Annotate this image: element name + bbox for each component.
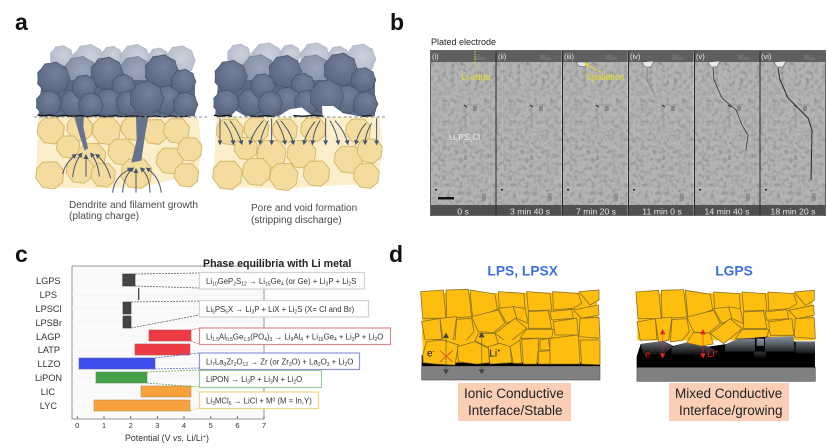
time labels: 14 min 40 s (705, 206, 750, 216)
y axis labels: LLZO (38, 359, 60, 369)
schematic: dendrite and filament growth (36, 44, 202, 193)
reaction box: LLZO: O (236, 358, 243, 366)
reaction box: halides: 0 (272, 398, 275, 404)
label: Li edge: Li edge (461, 72, 491, 82)
x axis numbers: 6 (235, 421, 240, 430)
reaction box: LAGP: Al (293, 332, 301, 342)
reaction box: argyrodites: 6 (212, 310, 215, 316)
callout: mixed conductive: Interface/growing (679, 403, 783, 418)
y axis labels: LPSCl (35, 304, 62, 314)
reaction box: LLZO: → Zr (or Zr (248, 358, 289, 366)
reaction box: LGPS: 4 (281, 282, 284, 288)
reaction box: LAGP: (PO (250, 332, 264, 342)
label: Li6PS5Cl: 6 (455, 138, 458, 144)
reaction box: LLZO: O (347, 358, 353, 366)
label: Li6PS5Cl: Li (449, 133, 455, 142)
y axis labels (35, 276, 62, 411)
reaction box: LLZO: 2 (344, 362, 347, 368)
panel b: time-lapse micrographs (430, 37, 826, 216)
reaction box: LLZO: 3 (224, 362, 227, 368)
reaction box: argyrodites: X → Li (228, 305, 252, 314)
frame labels: (vi) (761, 52, 772, 61)
x axis title: + (203, 434, 206, 440)
reaction box: argyrodites: S (X= Cl and Br) (297, 305, 355, 314)
reaction box: argyrodites: PS (215, 305, 225, 314)
reaction box: LGPS: S (236, 277, 241, 286)
y axis labels: LIC (41, 387, 55, 397)
reaction box: LLZO: + Li (329, 358, 345, 366)
label: Li6PS5Cl: 5 (469, 138, 472, 144)
reaction box: LiPON: P + Li (250, 375, 270, 384)
x axis numbers: 2 (129, 421, 133, 430)
y axis labels: LAGP (36, 332, 60, 342)
y axis labels: LPS (40, 290, 57, 300)
panel label c: c (15, 241, 28, 267)
reaction box: halides: → LiCl + M (232, 396, 272, 406)
reaction box: LGPS: 2 (233, 282, 236, 288)
bars (79, 274, 191, 411)
label: Li edge (461, 51, 491, 82)
reaction box: argyrodites: 2 (294, 310, 297, 316)
caption: dendrite growth: (plating charge) (69, 211, 139, 222)
callout: mixed conductive: Mixed Conductive (675, 386, 782, 401)
time labels: 11 min 0 s (642, 206, 682, 216)
time labels: 18 min 20 s (771, 206, 816, 216)
reaction box: LAGP: 4 (334, 337, 337, 343)
caption: pore formation: Pore and void formation (251, 203, 357, 214)
reaction box: LGPS: 15 (265, 282, 271, 288)
frame labels: (i) (432, 52, 439, 61)
x axis numbers: 3 (155, 421, 160, 430)
label: lithium ion: Li (707, 349, 715, 360)
reaction box: LAGP: 3 (352, 337, 355, 343)
frame labels: (iv) (630, 52, 641, 61)
interface dashed line (34, 116, 387, 118)
callout: ionic conductive (458, 383, 571, 421)
x axis numbers (75, 421, 266, 430)
reaction box: halides: 3 (212, 401, 215, 407)
reaction box: LiPON: O (296, 375, 302, 384)
x axis numbers: 0 (75, 421, 79, 430)
reaction box: LiPON: 2 (293, 380, 296, 386)
micrograph frames (430, 50, 826, 216)
reaction box: LLZO: La (215, 358, 224, 366)
spallation flakes and cracks (576, 61, 812, 180)
frame labels (432, 52, 772, 61)
reaction box: halides: 6 (229, 401, 232, 407)
reaction box: LAGP: 1.5 (212, 337, 219, 343)
reaction box: LGPS: GeP (218, 277, 233, 286)
heading: plated electrode: Plated electrode (431, 37, 496, 47)
label: lithium ion: Li (489, 348, 497, 359)
reaction box: LLZO: Zr (226, 358, 234, 366)
label: electron: e (645, 349, 651, 360)
label: lithium ion: + (715, 349, 719, 355)
reaction box: LAGP: 4 (300, 337, 303, 343)
transport arrows (443, 332, 485, 374)
y axis labels: LATP (38, 345, 60, 355)
reaction box: LAGP: 0.5 (226, 337, 233, 343)
frame labels: (ii) (498, 52, 507, 61)
reaction box: LGPS: P + Li (328, 277, 349, 286)
reaction box: LLZO: 2 (234, 362, 237, 368)
heading: LPS, LPSX: LPS, LPSX (487, 264, 559, 278)
reaction box: LAGP: Ge (233, 332, 243, 342)
reaction box: argyrodites (200, 300, 368, 317)
reaction box: LLZO: 7 (212, 362, 215, 368)
reaction box: halides: MCl (215, 396, 229, 406)
y axis labels: LYC (40, 401, 57, 411)
callout: ionic conductive: Interface/Stable (468, 403, 563, 418)
reaction box: LGPS: 12 (241, 282, 247, 288)
panel c: stability window chart (35, 258, 390, 443)
reaction box: LGPS: Ge (271, 277, 281, 286)
reaction box: LLZO: 3 (289, 362, 292, 368)
y axis labels: LiPON (35, 373, 62, 383)
reaction box: LAGP: P + Li (354, 332, 375, 342)
reaction box: LAGP: 9 (291, 337, 294, 343)
panel label d: d (389, 241, 403, 267)
schematic: growing interface (636, 290, 815, 381)
schematic: stable interface (421, 289, 600, 380)
x axis title: Potential (V vs. Li/Li (125, 433, 203, 443)
label: electron: - (433, 349, 435, 355)
label: Li6PS5Cl: Cl (472, 133, 480, 142)
reaction box: LAGP: Li (206, 332, 212, 342)
reaction box: LAGP: 4 (264, 337, 267, 343)
label: electron: e (427, 349, 433, 360)
reaction box: LiPON: LiPON → Li (206, 375, 247, 384)
label: electron: - (651, 350, 653, 356)
reaction box: LLZO: O (321, 358, 327, 366)
reaction box: LiPON: N + Li (273, 375, 294, 384)
transport arrows (660, 329, 706, 359)
reaction box: LAGP: 15 (318, 337, 324, 343)
reaction box: LGPS: 10 (212, 282, 218, 288)
reaction box: LLZO (200, 353, 360, 370)
reaction box: halides: (M = In,Y) (275, 396, 312, 406)
reaction box: LAGP: Al (219, 332, 226, 342)
label: lithium ion: + (497, 349, 501, 355)
caption: dendrite growth: Dendrite and filament growth (69, 200, 198, 211)
reaction box: LAGP: → Li (272, 332, 291, 342)
reaction box: LAGP: 1.5 (243, 337, 250, 343)
frame labels: (v) (696, 52, 705, 61)
reaction box: LGPS: Li (206, 277, 212, 286)
reaction box: halides (200, 392, 318, 408)
reaction box: LLZO: Li (206, 358, 212, 366)
reaction box: LAGP: 2 (375, 337, 378, 343)
time labels: 0 s (457, 206, 469, 216)
frame labels: (iii) (564, 52, 574, 61)
reaction box: argyrodites: 3 (251, 310, 254, 316)
callout: ionic conductive: Ionic Conductive (464, 386, 564, 401)
reaction box: LAGP: O (377, 332, 383, 342)
x axis title: ) (206, 433, 209, 443)
reaction box: LiPON: 3 (270, 380, 273, 386)
scale bar (438, 197, 454, 200)
reaction box: LGPS: S (351, 277, 356, 286)
label: spallation with arrow: Spallation (586, 72, 625, 82)
reaction box: LGPS: 2 (348, 282, 351, 288)
time labels: 3 min 40 s (510, 206, 551, 216)
reaction box: LAGP: ) (267, 332, 270, 342)
panel d: interface comparison (421, 264, 815, 421)
heading: LGPS: LGPS (715, 264, 753, 278)
x axis numbers: 7 (262, 421, 266, 430)
callout: mixed conductive (669, 383, 789, 421)
dashed connectors (131, 273, 199, 411)
heading: phase equilibria: Phase equilibria with Li metal (203, 258, 351, 270)
x axis numbers: 1 (102, 421, 106, 430)
reaction box: halides: Li (206, 396, 212, 406)
reaction box: LGPS (200, 272, 364, 289)
reaction box: LAGP: + Li (337, 332, 352, 342)
panel a: dendrite and void schematics (34, 43, 387, 226)
reaction box: LLZO: 3 (327, 362, 330, 368)
reaction box: LGPS: → Li (247, 277, 265, 286)
reaction box: LiPON: 3 (247, 380, 250, 386)
time labels (457, 206, 816, 216)
y axis labels: LPSBr (35, 318, 62, 328)
reaction box: LAGP: + Li (303, 332, 318, 342)
reaction box: argyrodites: P + LiX + Li (254, 305, 295, 314)
reaction box: LAGP: 3 (270, 337, 273, 343)
reaction box: LiPON (200, 370, 322, 388)
reaction box: LGPS: 3 (326, 282, 329, 288)
reaction box: LAGP: Ge (324, 332, 334, 342)
plot frame and axes (72, 266, 264, 419)
label: spallation with arrow (584, 63, 625, 82)
y axis labels: LGPS (36, 276, 60, 286)
schematic: pore and void formation (213, 43, 383, 191)
reaction box: LAGP (200, 328, 390, 344)
time labels: 7 min 20 s (576, 206, 617, 216)
panel label a: a (15, 9, 28, 35)
reaction box: argyrodites: 5 (225, 310, 228, 316)
reaction box: LLZO: 2 (318, 362, 321, 368)
panel label b: b (390, 9, 404, 35)
label: Li6PS5Cl: PS (458, 133, 470, 142)
x axis numbers: 5 (209, 421, 213, 430)
caption: pore formation: (stripping discharge) (251, 215, 342, 226)
x axis numbers: 4 (182, 421, 186, 430)
reaction box: LLZO: O) + La (292, 358, 318, 366)
reaction box: LGPS: (or Ge) + Li (284, 277, 326, 286)
blocked electron cross (440, 351, 453, 362)
reaction box: LLZO: 12 (243, 362, 248, 368)
reaction box: argyrodites: Li (206, 305, 212, 314)
